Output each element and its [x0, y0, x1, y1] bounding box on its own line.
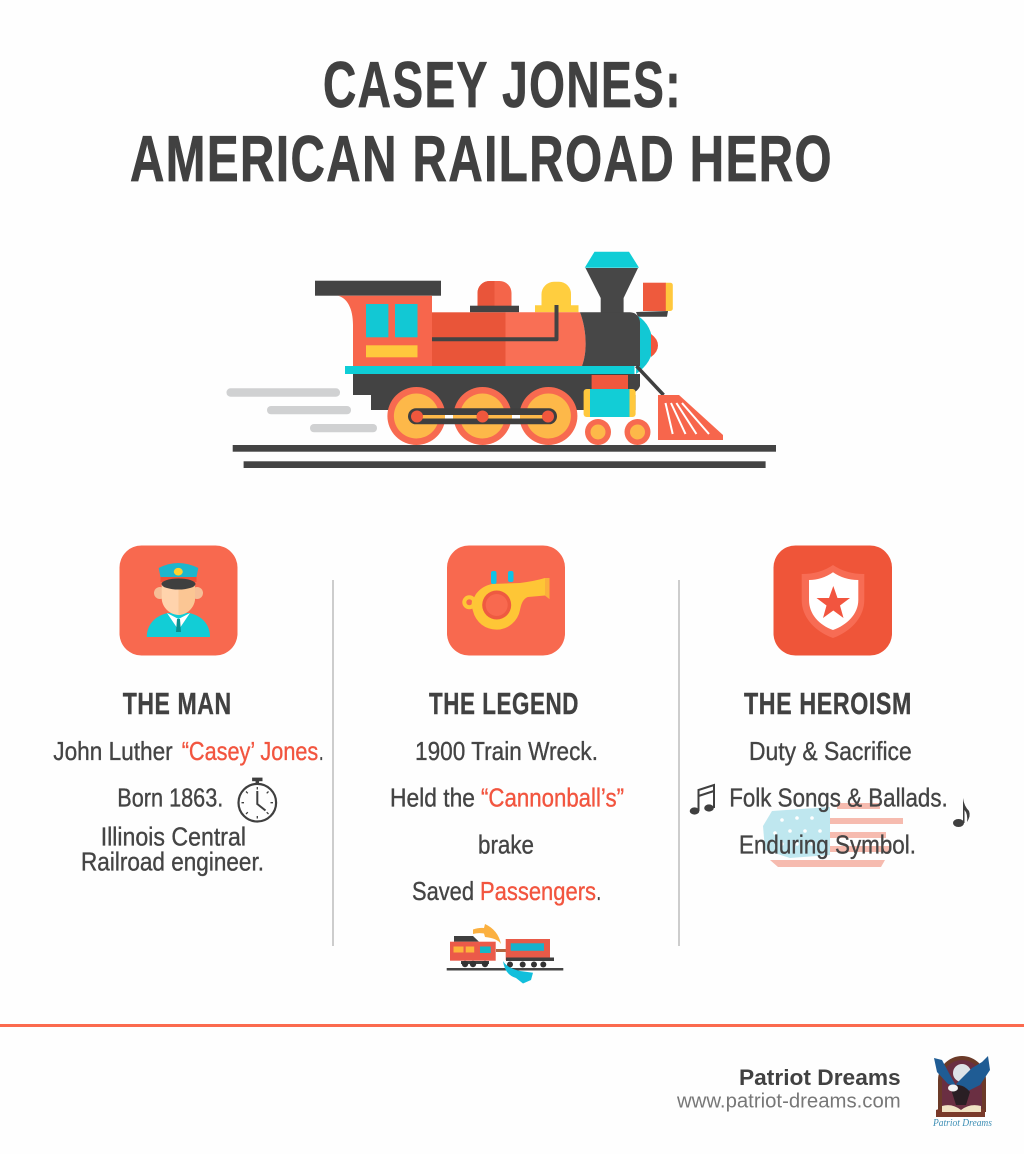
text block: Folk Songs & Ballads. — [729, 783, 948, 813]
text block — [729, 736, 948, 859]
rails — [233, 445, 776, 468]
text block: 1900 Train Wreck. — [415, 736, 598, 766]
drive wheels — [387, 387, 577, 445]
front cone and knob — [636, 316, 658, 374]
heading: THE HEROISM — [744, 686, 912, 721]
divider — [678, 580, 680, 946]
cowcatcher — [636, 366, 723, 440]
text block: Held the — [390, 783, 475, 813]
icon: whistle — [447, 546, 565, 656]
footer: brand text: www.patriot-dreams.com — [676, 1091, 901, 1113]
text block: Duty & Sacrifice — [749, 736, 912, 766]
text block: John Luther — [53, 736, 173, 766]
icon: uncoupled train cars — [447, 924, 563, 984]
smokestack — [585, 252, 639, 313]
heading: THE MAN — [123, 686, 232, 721]
icon: conductor — [120, 546, 238, 656]
logo: eagle and book — [932, 1056, 992, 1129]
text block: “Casey’ Jones — [182, 736, 318, 766]
logo: eagle and book: Patriot Dreams — [932, 1118, 992, 1129]
text block: Illinois Central — [101, 822, 246, 852]
text block: Saved — [412, 876, 474, 906]
watermark: american flag — [763, 803, 903, 867]
text block: Railroad engineer. — [81, 847, 264, 877]
frame — [353, 374, 640, 410]
domes — [470, 281, 578, 312]
footer: brand text: Patriot Dreams — [739, 1065, 901, 1090]
cylinder — [584, 375, 636, 417]
text block — [53, 736, 324, 877]
footer: brand text — [676, 1065, 901, 1113]
panel: the heroism — [690, 546, 970, 867]
icon: shield — [774, 546, 892, 656]
title — [130, 48, 833, 195]
icon: double music note — [690, 785, 714, 815]
text block — [390, 736, 624, 906]
boiler — [432, 305, 640, 366]
divider — [332, 580, 334, 946]
speed lines — [226, 388, 377, 432]
text block: Enduring Symbol. — [739, 829, 916, 859]
text block: . — [319, 736, 324, 766]
headlamp — [636, 283, 673, 317]
text block: Born 1863. — [117, 783, 223, 813]
panel: the legend — [390, 546, 624, 984]
leading wheels — [585, 419, 650, 445]
text block: Passengers — [480, 876, 596, 906]
icon: stopwatch — [238, 778, 276, 822]
title: CASEY JONES: — [323, 48, 682, 121]
footer rule — [0, 1024, 1024, 1027]
heading: THE LEGEND — [429, 686, 579, 721]
panel: the man — [53, 546, 324, 877]
illustration: steam locomotive — [226, 252, 776, 468]
running board — [345, 366, 634, 374]
text block: “Cannonball’s” — [481, 783, 624, 813]
text block: brake — [478, 829, 534, 859]
text block: . — [596, 876, 601, 906]
cab — [315, 281, 441, 366]
icon: music note — [953, 798, 970, 827]
